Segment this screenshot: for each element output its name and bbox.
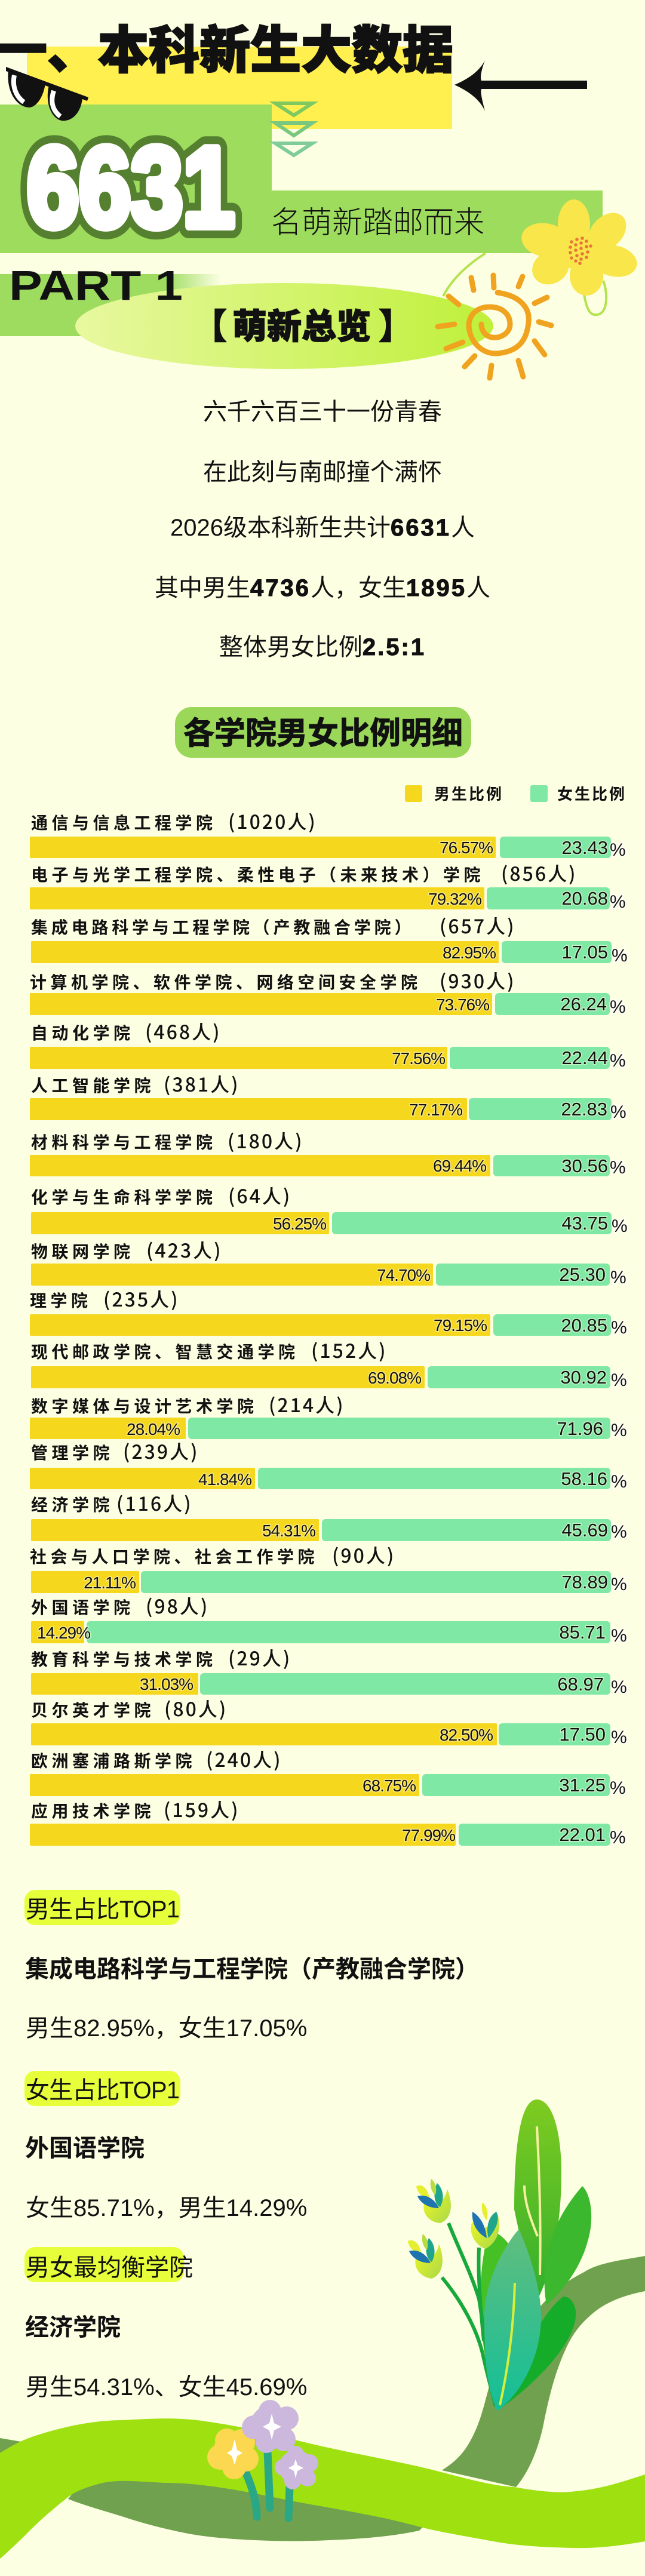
college name: (235人) [103, 1285, 180, 1312]
stacked bar chart [30, 807, 628, 1848]
male share [30, 1314, 490, 1336]
male share [31, 1264, 433, 1286]
male percentage: 14.29% [37, 1624, 90, 1642]
college name: (29人) [228, 1644, 291, 1671]
college: 经济学院 [25, 2308, 121, 2343]
female share: % [610, 892, 626, 912]
tag: 男生占比TOP1 [26, 1896, 180, 1923]
dark ribbon rising right [442, 2256, 645, 2487]
section title: 萌新总览 [232, 299, 371, 349]
female share [495, 993, 626, 1017]
female share: % [611, 1421, 627, 1440]
central leaf [484, 2229, 541, 2411]
male share: 82.95% [443, 943, 496, 962]
icon: three down triangles [275, 103, 312, 155]
college name: (657人) [440, 912, 516, 939]
female share: 23.43 [561, 837, 608, 858]
female share: % [611, 1522, 627, 1542]
college name: 现代邮政学院、智慧交通学院 [31, 1339, 299, 1363]
row: 集成电路科学与工程学院 [31, 912, 628, 966]
row: 教育科学与技术学院 [31, 1644, 627, 1697]
tall leaf [514, 2099, 561, 2305]
college name: (64人) [228, 1182, 291, 1209]
lime ribbon [0, 2418, 645, 2559]
college name: 贝尔英才学院 [31, 1698, 155, 1722]
cream vein [524, 2126, 540, 2275]
female share [469, 1098, 626, 1122]
bud 3 [408, 2234, 443, 2279]
female share: 17.05 [561, 942, 608, 963]
male share [31, 1621, 84, 1643]
row: 应用技术学院 [30, 1796, 626, 1848]
male share [31, 1673, 198, 1695]
female share: % [611, 1318, 627, 1338]
male share: 69.08% [368, 1369, 421, 1387]
row: 管理学院 [30, 1437, 627, 1492]
male share: 56.25% [273, 1215, 326, 1233]
college: 集成电路科学与工程学院（产教融合学院） [25, 1950, 479, 1984]
college name: 自动化学院 [31, 1020, 134, 1044]
legend: 女生比例 [557, 782, 626, 804]
row: 电子与光学工程学院 [30, 859, 626, 912]
intro line 4: 其中男生4736人，女生1895人 [155, 575, 490, 601]
row: 外国语学院 [31, 1592, 627, 1646]
row: 现代邮政学院 [31, 1336, 627, 1390]
female share: 58.16 [561, 1468, 607, 1489]
female share [322, 1519, 627, 1542]
title: 一、本科新生大数据 [0, 10, 453, 83]
college name: (152人) [311, 1336, 388, 1364]
female share: % [611, 1626, 627, 1646]
legend [405, 782, 626, 804]
male share [30, 1774, 419, 1796]
female share [500, 837, 626, 860]
female share: 43.75 [561, 1213, 608, 1234]
male share: 77.56% [392, 1049, 445, 1068]
college name: 物联网学院 [31, 1239, 134, 1263]
college name: 理学院 [30, 1288, 92, 1312]
intro line 5: 整体男女比例2.5:1 [219, 634, 426, 660]
percentages: 男生82.95%，女生17.05% [26, 2015, 307, 2042]
female share: % [610, 1778, 626, 1798]
male share: 76.57% [440, 838, 493, 857]
female share: 85.71 [559, 1622, 606, 1643]
big number 6631: 6631 [27, 124, 235, 251]
flowers [207, 2400, 318, 2518]
male share: 79.32% [428, 890, 481, 908]
college name: (90人) [332, 1541, 395, 1569]
female share [493, 1314, 627, 1338]
female share [188, 1418, 627, 1440]
row: 贝尔英才学院 [31, 1695, 627, 1747]
college name: 经济学院 [31, 1492, 113, 1516]
male share: 41.84% [198, 1470, 251, 1489]
bud 2 [471, 2202, 499, 2249]
leaf vein [500, 2283, 515, 2405]
female share [200, 1673, 627, 1697]
stems [442, 2223, 496, 2406]
college name: 社会与人口学院、社会工作学院 [30, 1544, 318, 1568]
row: 计算机学院 [30, 967, 626, 1017]
row: 自动化学院 [30, 1018, 626, 1071]
stem leaf back [480, 2230, 520, 2365]
green fading band [0, 274, 221, 336]
male share [30, 837, 496, 858]
female share: 22.44 [561, 1047, 608, 1068]
tag: 女生占比TOP1 [26, 2077, 180, 2104]
plant [408, 2099, 591, 2411]
male share [31, 941, 499, 963]
female share: % [610, 997, 626, 1017]
female share: % [611, 1370, 627, 1390]
college name: 欧洲塞浦路斯学院 [31, 1748, 196, 1772]
highlight: most balanced [24, 2247, 307, 2400]
dark ribbon lower [68, 2472, 430, 2541]
college name: 通信与信息工程学院 [31, 810, 217, 834]
section title: 【 [192, 299, 227, 349]
college name: 教育科学与技术学院 [31, 1647, 217, 1671]
subtitle: 名萌新踏邮而来 [271, 198, 484, 242]
highlight: male top [24, 1890, 479, 2042]
intro line 1: 六千六百三十一份青春 [203, 399, 442, 425]
row: 社会与人口学院 [30, 1541, 627, 1594]
male share: 74.70% [377, 1266, 430, 1284]
college name: (381人) [164, 1070, 240, 1098]
female share: 25.30 [559, 1264, 606, 1285]
female share: % [610, 1828, 626, 1848]
intro line 2: 在此刻与南邮撞个满怀 [203, 459, 442, 485]
female share: % [610, 1158, 626, 1178]
female share [450, 1047, 626, 1071]
female share [487, 887, 626, 912]
female share: % [612, 1216, 628, 1236]
female share [87, 1621, 627, 1646]
highlight: female top [24, 2071, 307, 2221]
female share: % [612, 946, 628, 966]
yellow flower [207, 2429, 259, 2479]
male share [30, 1418, 186, 1439]
male share [30, 1468, 255, 1489]
female share [141, 1571, 627, 1594]
lime ellipse [75, 283, 493, 369]
female share: % [611, 1727, 627, 1747]
college name: (240人) [206, 1745, 282, 1773]
header banner [0, 10, 603, 253]
male share [30, 887, 484, 909]
male share [31, 1212, 329, 1234]
college name: (116人) [116, 1489, 193, 1517]
lower right leaf [497, 2297, 576, 2411]
female share: 17.50 [559, 1724, 606, 1745]
percentages: 女生85.71%，男生14.29% [26, 2195, 307, 2221]
college name: 集成电路科学与工程学院（产教融合学院） [31, 915, 414, 939]
female share [422, 1774, 626, 1798]
part label: PART 1 [9, 262, 183, 309]
male share: 68.75% [363, 1776, 416, 1795]
green number block [0, 104, 603, 253]
college name: (214人) [269, 1391, 345, 1418]
college name: (1020人) [228, 807, 317, 835]
female share [502, 941, 628, 966]
icon: sunglasses [6, 67, 88, 121]
female share: % [610, 1102, 626, 1122]
intro line 3: 2026级本科新生共计6631人 [170, 515, 475, 541]
dark ribbon left tip [0, 2438, 24, 2453]
section header: part 1 [0, 262, 493, 369]
college name: 化学与生命科学学院 [31, 1185, 217, 1209]
college name: (159人) [164, 1796, 240, 1823]
female share [258, 1468, 627, 1492]
college name: 计算机学院、软件学院、网络空间安全学院 [30, 970, 422, 994]
male share: 79.15% [434, 1316, 487, 1335]
male share: 31.03% [140, 1675, 193, 1693]
college name: (856人) [501, 859, 578, 887]
female share [436, 1264, 626, 1287]
college name: (239人) [123, 1437, 199, 1465]
male share [31, 1571, 139, 1593]
chart heading pill: 各学院男女比例明细 [183, 708, 463, 753]
college: 外国语学院 [25, 2129, 145, 2163]
female share [499, 1723, 627, 1747]
college name: 人工智能学院 [31, 1073, 155, 1097]
row: 数字媒体与设计艺术学院 [30, 1391, 627, 1440]
college name: (98人) [146, 1592, 209, 1619]
college name: (930人) [440, 967, 516, 994]
female share: % [610, 840, 626, 860]
male share: 54.31% [262, 1521, 315, 1540]
percentages: 男生54.31%、女生45.69% [26, 2374, 307, 2400]
female share [332, 1212, 628, 1236]
intro text [155, 399, 490, 660]
male share: 28.04% [127, 1420, 180, 1438]
row: 欧洲塞浦路斯学院 [30, 1745, 626, 1798]
college name: (423人) [146, 1236, 223, 1264]
row: 理学院 [30, 1285, 627, 1338]
big number 6631: 6631 [27, 124, 235, 251]
yellow title block [27, 47, 452, 129]
icon: sun [438, 275, 551, 378]
male share [31, 1723, 497, 1745]
icon: flower [443, 199, 640, 315]
row: 化学与生命科学学院 [31, 1182, 628, 1236]
college name: (80人) [164, 1695, 228, 1722]
row: 人工智能学院 [30, 1070, 626, 1122]
female share: 71.96 [557, 1418, 603, 1439]
right leaf [545, 2186, 591, 2305]
row: 物联网学院 [31, 1236, 626, 1287]
male share [30, 1047, 447, 1069]
college name: 管理学院 [31, 1440, 113, 1464]
female share: % [610, 1268, 626, 1287]
flower stems [246, 2451, 290, 2518]
male share [31, 1366, 425, 1388]
female share: % [611, 1472, 627, 1492]
female share: 26.24 [560, 994, 607, 1015]
female share [428, 1366, 627, 1390]
female share: 31.25 [559, 1775, 606, 1796]
male share [30, 1155, 490, 1176]
icon: left arrow [454, 60, 587, 111]
male share: 69.44% [433, 1157, 486, 1175]
college name: (180人) [228, 1127, 304, 1154]
male share [30, 1824, 456, 1846]
row: 经济学院 [31, 1489, 627, 1542]
college name: 应用技术学院 [31, 1799, 155, 1822]
college name: 电子与光学工程学院、柔性电子（未来技术）学院 [31, 862, 484, 886]
purple flower large [242, 2400, 299, 2453]
male share: 77.99% [402, 1826, 455, 1845]
female share: % [610, 1051, 626, 1071]
male share: 21.11% [84, 1573, 136, 1592]
row: 材料科学与工程学院 [30, 1127, 626, 1178]
male share [30, 1098, 467, 1120]
college name: (468人) [145, 1018, 222, 1045]
college name: 材料科学与工程学院 [31, 1130, 217, 1154]
female share: 20.85 [561, 1315, 607, 1336]
female share: 30.92 [560, 1367, 607, 1388]
row: 通信与信息工程学院 [30, 807, 626, 860]
female share: 20.68 [561, 888, 608, 909]
legend: 男生比例 [434, 782, 503, 804]
purple flower small [275, 2446, 318, 2489]
tag: 男女最均衡学院 [26, 2255, 193, 2281]
female share: 22.83 [561, 1099, 607, 1120]
female share: 22.01 [559, 1824, 606, 1845]
female share: 45.69 [561, 1520, 608, 1541]
male share: 73.76% [436, 995, 489, 1014]
female share: 78.89 [561, 1572, 608, 1593]
college name: 数字媒体与设计艺术学院 [31, 1394, 258, 1418]
female share: 68.97 [557, 1674, 604, 1695]
female share: % [611, 1677, 627, 1697]
college name: 外国语学院 [31, 1595, 134, 1619]
male share [31, 1519, 319, 1541]
female share [493, 1155, 626, 1178]
female share: % [611, 1575, 627, 1594]
ribbons [0, 2256, 645, 2559]
male share: 82.50% [440, 1726, 493, 1744]
female share [459, 1824, 626, 1848]
male share: 77.17% [409, 1101, 462, 1119]
male share [30, 993, 492, 1015]
female share: 30.56 [561, 1155, 608, 1176]
bud 1 [416, 2179, 451, 2223]
section title: 】 [379, 299, 413, 349]
